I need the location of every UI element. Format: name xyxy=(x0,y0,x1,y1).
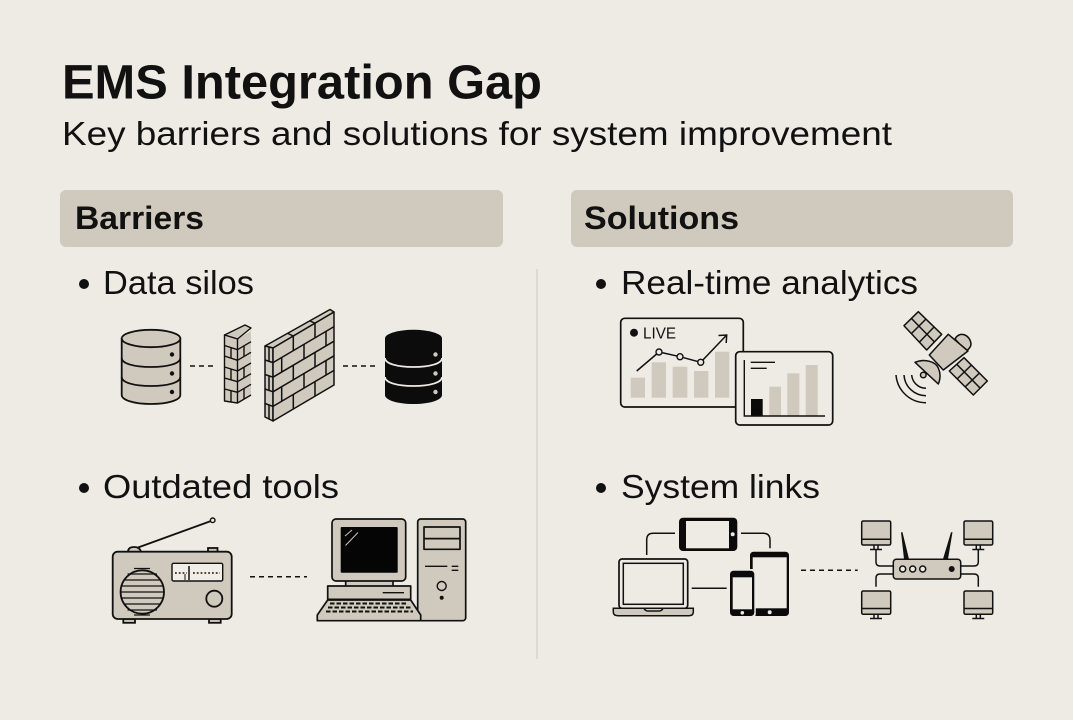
keyboard and base xyxy=(317,586,421,621)
monitor xyxy=(332,519,406,586)
title: EMS Integration Gap xyxy=(62,56,542,110)
icon: satellite xyxy=(896,312,987,403)
icon: router network xyxy=(862,521,993,618)
icon: bar chart card xyxy=(736,352,833,425)
subtitle: Key barriers and solutions for system improvement xyxy=(62,116,893,153)
monitor top-left xyxy=(862,521,891,550)
icon: tan database xyxy=(122,330,180,404)
panel: solutions header: Solutions xyxy=(584,200,739,236)
bullet: outdated tools: Outdated tools xyxy=(103,468,339,505)
icon: black database xyxy=(385,330,442,404)
connector: database to small wall xyxy=(190,365,213,367)
panel: solutions header xyxy=(571,190,1013,247)
icon: live analytics dashboard xyxy=(621,318,743,407)
icon: radio xyxy=(113,518,232,623)
bullet: system links: System links xyxy=(621,468,820,505)
panel: barriers header: Barriers xyxy=(75,200,204,236)
icon: small brick wall xyxy=(224,325,251,403)
connector: wall to black database xyxy=(343,365,375,367)
tower xyxy=(418,519,466,621)
landscape phone xyxy=(679,518,737,551)
icon: old desktop computer xyxy=(317,519,466,621)
monitor bottom-left xyxy=(862,591,891,618)
panel: barriers header xyxy=(60,190,503,247)
connector: radio to computer xyxy=(250,576,307,578)
monitor top-right xyxy=(964,521,993,550)
connector: devices to router xyxy=(801,569,858,571)
monitor bottom-right xyxy=(964,591,993,618)
laptop xyxy=(613,559,693,616)
bullet: data silos: Data silos xyxy=(103,264,254,301)
icon: large brick wall xyxy=(265,310,334,421)
bullet: real-time analytics: Real-time analytics xyxy=(621,264,918,301)
icon: linked devices xyxy=(613,518,789,618)
icon: live analytics dashboard: LIVE xyxy=(643,326,676,343)
tablet xyxy=(750,552,789,616)
smartphone xyxy=(728,569,756,618)
